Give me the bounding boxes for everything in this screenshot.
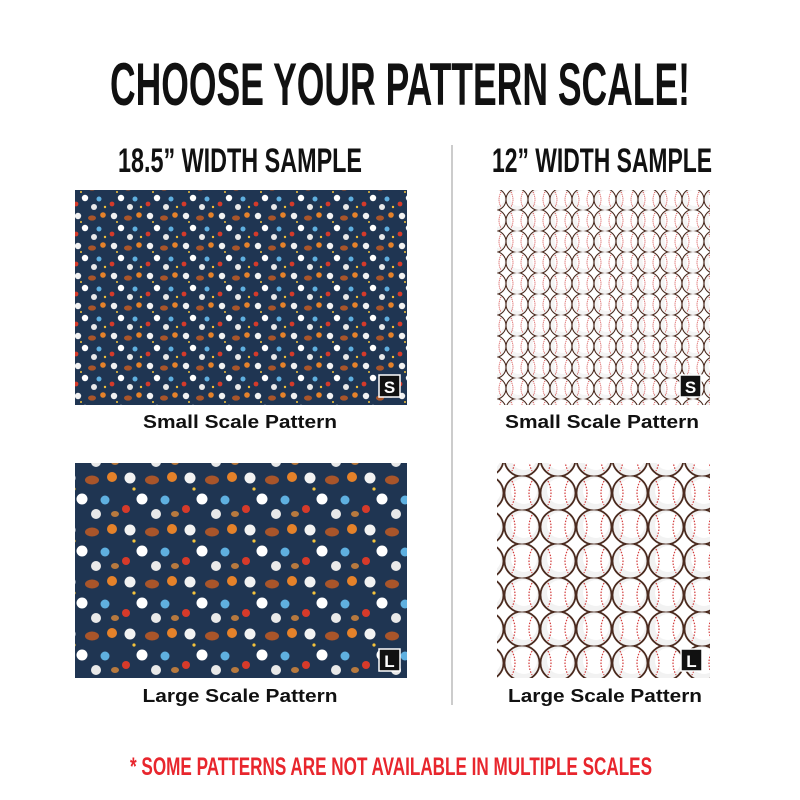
badge S <box>680 375 701 397</box>
label: small scale right: Small Scale Pattern <box>505 412 699 432</box>
label: large scale right: Large Scale Pattern <box>508 686 702 706</box>
badge L <box>379 649 400 671</box>
badge L <box>681 649 702 671</box>
badge L: L <box>686 652 697 671</box>
badge L: L <box>384 652 395 671</box>
panel: sports small <box>75 190 407 405</box>
badge S <box>379 375 400 397</box>
panel: baseball small <box>497 190 710 405</box>
badge S: S <box>384 378 395 397</box>
heading: 18.5 width: 18.5” WIDTH SAMPLE <box>118 142 362 180</box>
label: large scale left: Large Scale Pattern <box>142 686 338 706</box>
label: small scale left: Small Scale Pattern <box>143 412 337 432</box>
panel: sports large <box>75 463 407 678</box>
badge S: S <box>685 378 696 397</box>
panel: baseball large <box>497 463 710 678</box>
